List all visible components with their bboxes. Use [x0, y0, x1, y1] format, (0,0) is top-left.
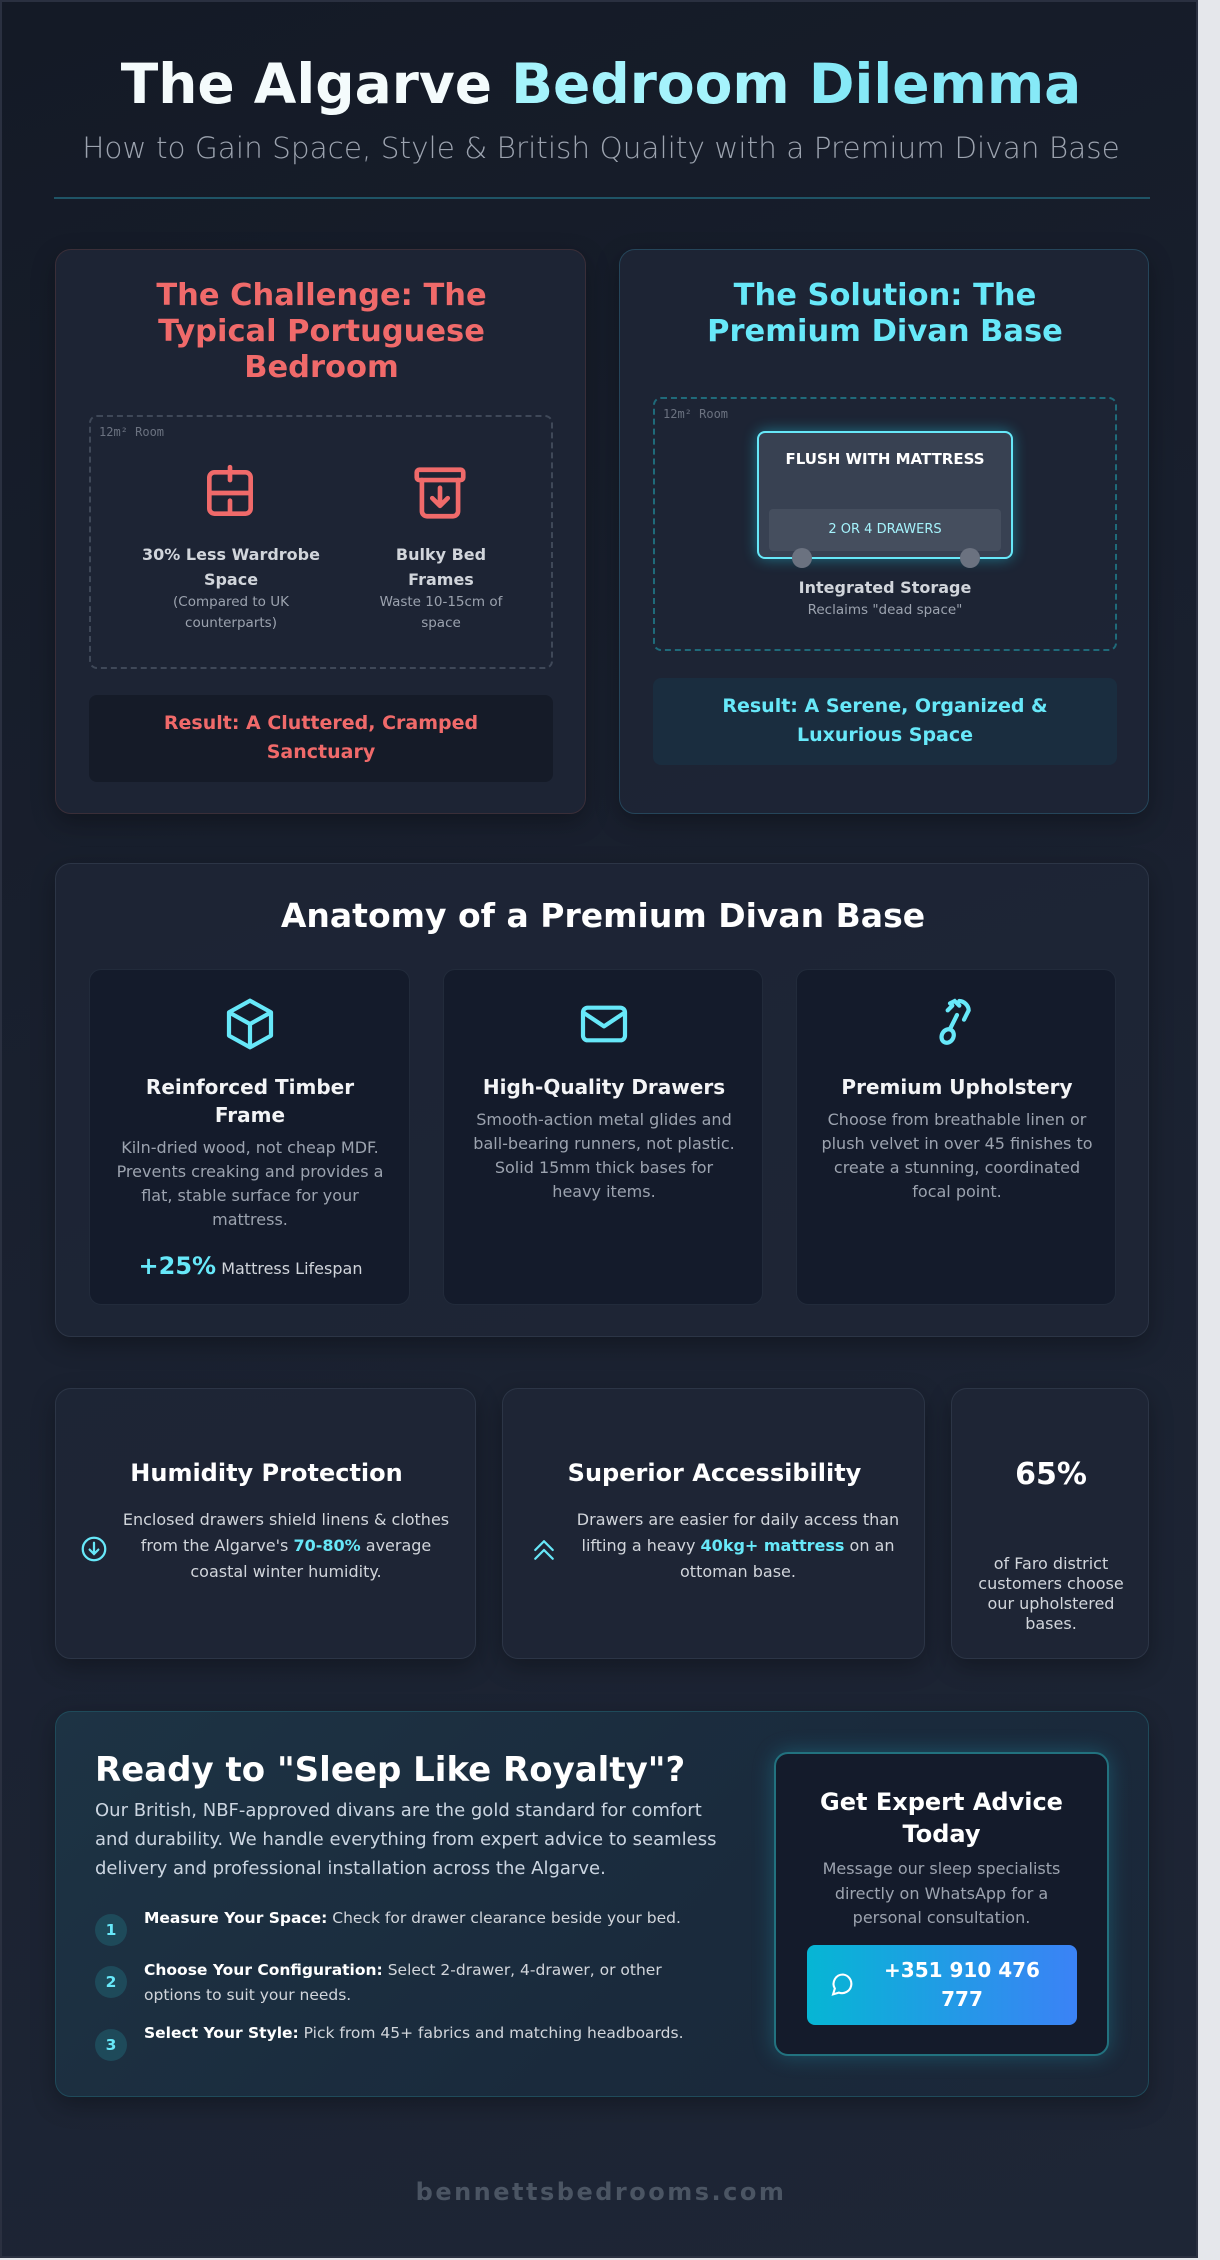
contact card: Today: [903, 1820, 980, 1848]
solution result: [653, 678, 1117, 765]
challenge result: [89, 695, 553, 782]
text: integrated storage: [799, 578, 971, 618]
cta heading: Ready to "Sleep Like Royalty"?: [95, 1750, 685, 1790]
steps list: Choose Your Configuration: Select 2-drawer, 4-drawer, or other options to suit your needs.: [144, 1961, 662, 2004]
icon: bulky bed box: [414, 467, 466, 519]
card: upholstery: Premium Upholstery: [841, 1075, 1073, 1099]
step 3: [95, 2024, 684, 2061]
text: bulky frames: space: [421, 615, 461, 631]
solution result: Result: A Serene, Organized &: [722, 695, 1048, 717]
text: less wardrobe: counterparts): [185, 615, 277, 631]
panel: anatomy: [55, 863, 1149, 1337]
footer url: bennettsbedrooms.com: [416, 2178, 786, 2206]
challenge heading: Typical Portuguese: [158, 314, 485, 349]
steps list: Select Your Style: Pick from 45+ fabrics and matching headboards.: [144, 2024, 684, 2042]
text: less wardrobe: Space: [204, 570, 258, 589]
panel: call to action: [55, 1711, 1149, 2097]
text: bulky frames: Bulky Bed: [396, 545, 486, 564]
solution heading: [707, 278, 1063, 349]
panel: humidity: [55, 1388, 476, 1659]
title: The Algarve Bedroom Dilemma: [121, 52, 1081, 116]
challenge result: Sanctuary: [267, 741, 375, 763]
stat: mattress lifespan: +25% Mattress Lifespan: [139, 1252, 362, 1280]
icon: drawer envelope: [580, 1006, 628, 1042]
drawers: [769, 509, 1001, 551]
solution result: Luxurious Space: [797, 724, 973, 746]
challenge heading: The Challenge: The: [156, 278, 487, 313]
card: upholstery: [796, 969, 1116, 1305]
cta paragraph: Our British, NBF-approved divans are the gold standard for comfort and durability. We handle everything from expert advice to seamless delivery and professional installation across the Algarve.: [95, 1800, 716, 1879]
icon: cube: [226, 998, 274, 1050]
solution room diagram: 12m² Room: [663, 407, 728, 421]
steps list: [95, 1909, 684, 2061]
whatsapp button: 777: [941, 1987, 983, 2011]
card: timber frame: [89, 969, 410, 1305]
steps list: 2: [106, 1973, 116, 1991]
card: timber frame: Kiln-dried wood, not cheap MDF. Prevents creaking and provides a flat, stable surface for your mattress.: [117, 1138, 383, 1229]
anatomy heading: Anatomy of a Premium Divan Base: [281, 896, 925, 935]
panel: humidity: Humidity Protection: [130, 1459, 403, 1487]
steps list: 3: [106, 2036, 116, 2054]
panel: stat 65%: [951, 1388, 1149, 1659]
challenge room diagram: [89, 415, 553, 669]
icon: wardrobe: [207, 464, 253, 516]
text: integrated storage: Reclaims "dead space": [808, 602, 962, 618]
challenge heading: Bedroom: [244, 350, 399, 385]
contact card: Message our sleep specialists directly on WhatsApp for a personal consultation.: [823, 1859, 1060, 1927]
whatsapp button: +351 910 476: [884, 1958, 1040, 1982]
text: less wardrobe: 30% Less Wardrobe: [142, 545, 320, 564]
solution heading: Premium Divan Base: [707, 314, 1063, 349]
panel: accessibility: [502, 1388, 925, 1659]
step 2: [95, 1961, 662, 2004]
step 1: [95, 1909, 681, 1946]
card: drawers: High-Quality Drawers: [483, 1075, 725, 1099]
subtitle: How to Gain Space, Style & British Quality with a Premium Divan Base: [82, 131, 1120, 165]
text: less wardrobe: [142, 545, 320, 631]
card: upholstery: Choose from breathable linen or plush velvet in over 45 finishes to create a stunning, coordinated focal point.: [821, 1110, 1093, 1201]
challenge heading: [156, 278, 487, 385]
drawers: 2 OR 4 DRAWERS: [828, 522, 942, 537]
card: timber frame: Reinforced Timber: [146, 1075, 354, 1099]
text: integrated storage: Integrated Storage: [799, 578, 971, 597]
steps list: 1: [106, 1921, 116, 1939]
divan illustration: [757, 431, 1013, 559]
panel: accessibility: Superior Accessibility: [568, 1459, 861, 1487]
card: drawers: [443, 969, 763, 1305]
panel: solution: [619, 249, 1149, 814]
panel: stat 65%: of Faro district customers choose our upholstered bases.: [978, 1554, 1124, 1633]
card: drawers: Smooth-action metal glides and ball-bearing runners, not plastic. Solid 15mm thick bases for heavy items.: [473, 1110, 735, 1201]
card: timber frame: Frame: [215, 1103, 285, 1127]
icon: chevrons up: [534, 1540, 554, 1560]
contact card: Get Expert Advice: [820, 1788, 1063, 1816]
whatsapp button: [807, 1945, 1077, 2025]
solution heading: The Solution: The: [734, 278, 1036, 313]
steps list: Measure Your Space: Check for drawer clearance beside your bed.: [144, 1909, 681, 1927]
icon: chat bubble: [832, 1974, 852, 1996]
panel: challenge: [55, 249, 586, 814]
text: bulky frames: Waste 10-15cm of: [380, 594, 502, 610]
text: less wardrobe: (Compared to UK: [173, 594, 289, 610]
text: bulky frames: Frames: [408, 570, 474, 589]
solution room diagram: [653, 397, 1117, 651]
panel: humidity: Enclosed drawers shield linens & clothes from the Algarve's 70-80% average coastal winter humidity.: [123, 1510, 449, 1581]
icon: brush: [939, 998, 971, 1045]
panel: stat 65%: 65%: [1015, 1457, 1087, 1492]
panel: accessibility: Drawers are easier for daily access than lifting a heavy 40kg+ mattress on an ottoman base.: [577, 1510, 899, 1581]
text: bulky frames: [380, 545, 503, 631]
challenge room diagram: 12m² Room: [99, 425, 164, 439]
icon: humidity: [82, 1536, 106, 1562]
challenge result: Result: A Cluttered, Cramped: [164, 712, 478, 734]
contact card: [774, 1752, 1109, 2056]
divan illustration: FLUSH WITH MATTRESS: [785, 450, 985, 468]
